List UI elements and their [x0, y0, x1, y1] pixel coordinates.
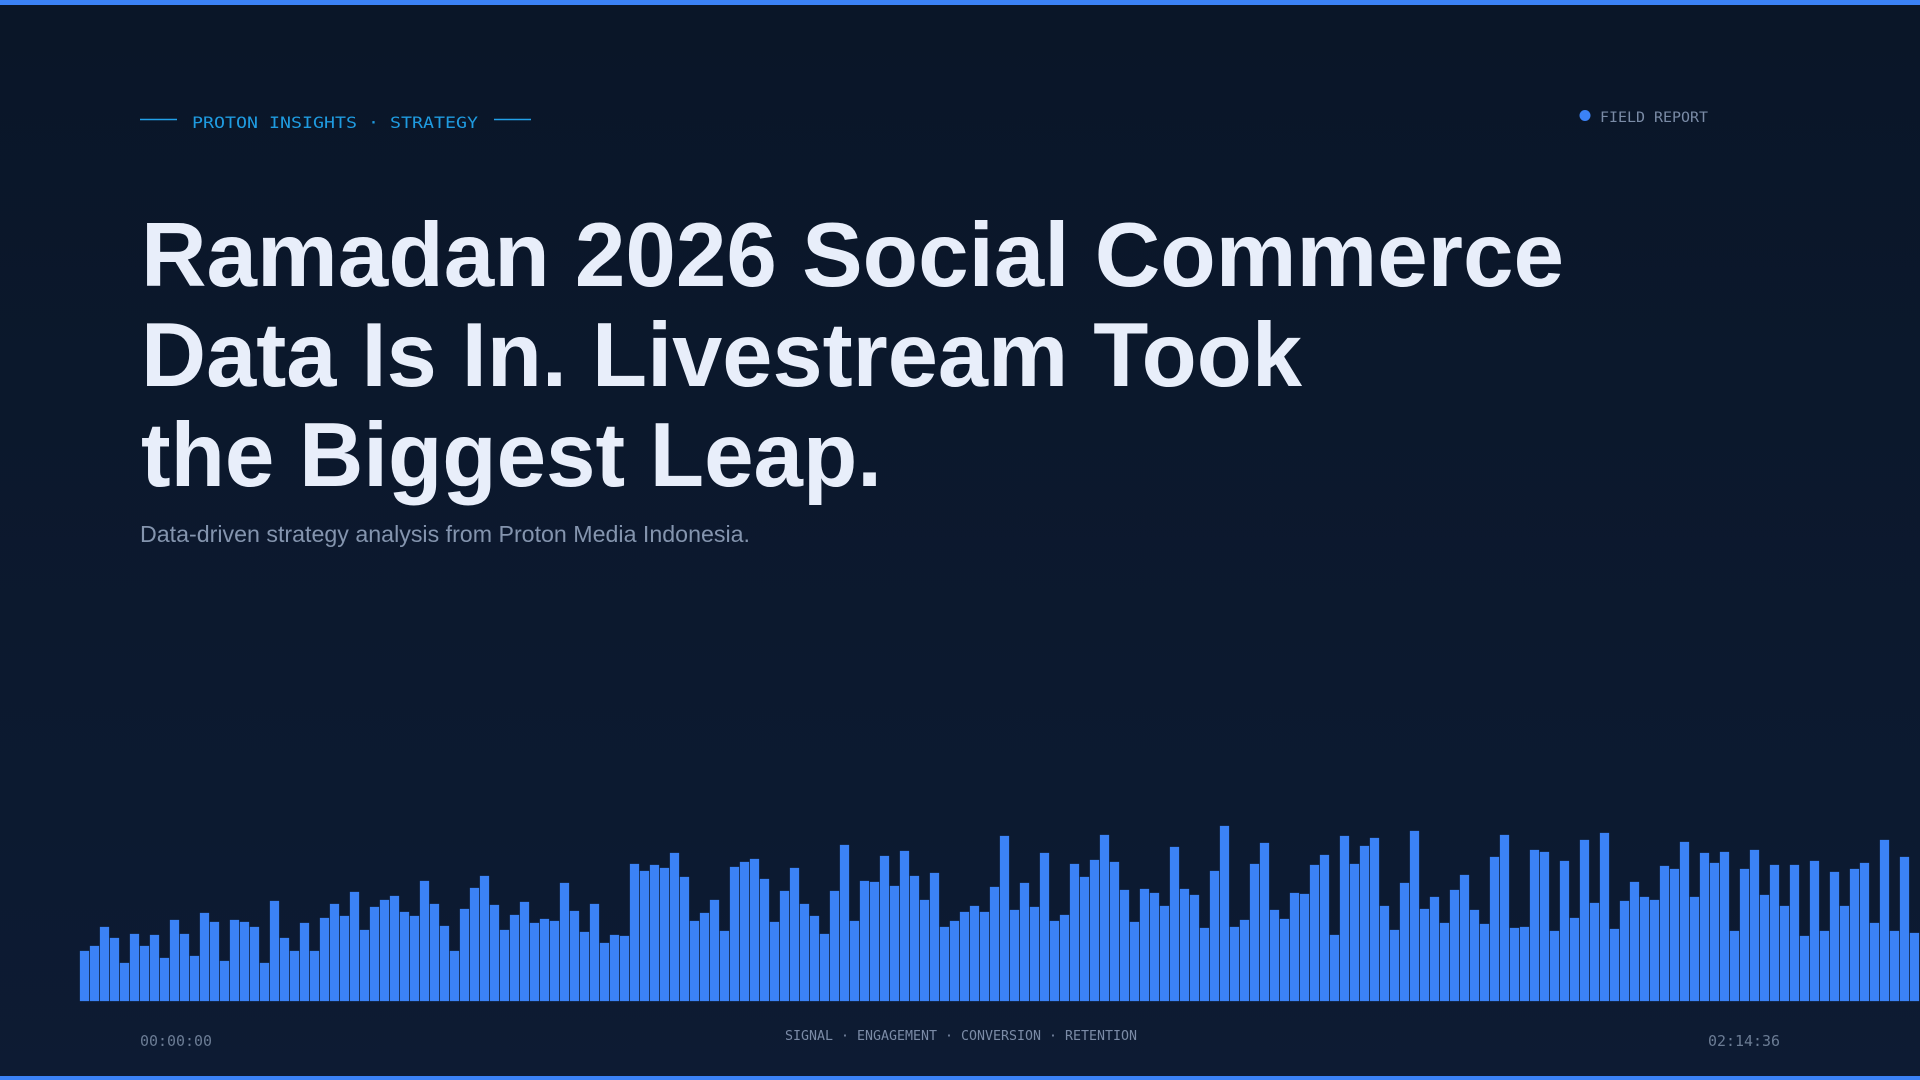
- title: [141, 205, 1564, 506]
- title: Data Is In. Livestream Took: [141, 305, 1302, 406]
- start timecode: 00:00:00: [140, 1032, 212, 1050]
- field report badge: FIELD REPORT: [1600, 110, 1709, 126]
- top accent bar: [0, 0, 1920, 5]
- title: Ramadan 2026 Social Commerce: [141, 205, 1564, 306]
- eyebrow label: PROTON INSIGHTS · STRATEGY: [192, 113, 478, 132]
- end timecode: 02:14:36: [1708, 1032, 1780, 1050]
- waveform bar chart: [80, 826, 1919, 1001]
- title: the Biggest Leap.: [141, 405, 882, 506]
- bottom accent bar: [0, 1076, 1920, 1080]
- subtitle: Data-driven strategy analysis from Proton Media Indonesia.: [140, 521, 750, 547]
- center stage labels: SIGNAL · ENGAGEMENT · CONVERSION · RETENTION: [785, 1029, 1137, 1044]
